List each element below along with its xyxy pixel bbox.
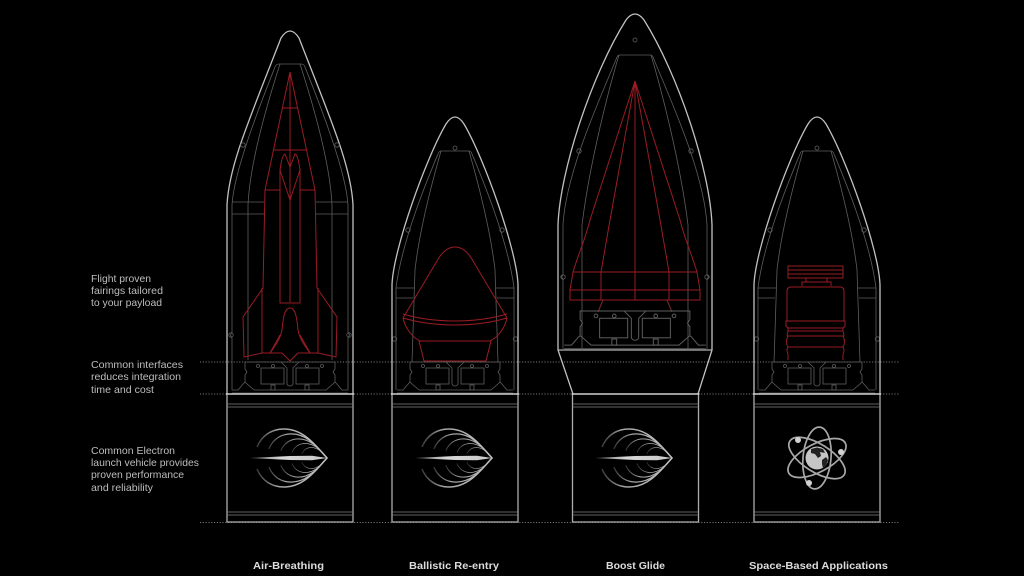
text: launch vehicle note: and reliability: [91, 483, 154, 494]
rocket: Space-Based Applications: [753, 117, 881, 522]
column titles: [253, 561, 888, 572]
text: launch vehicle note: [91, 446, 199, 494]
interface bay: [759, 362, 875, 393]
fairing outline and interior: [392, 117, 518, 394]
booster section: [572, 394, 700, 522]
enlarged interface bay: [564, 311, 706, 349]
text: launch vehicle note: Common Electron: [91, 446, 175, 457]
booster section: [753, 394, 881, 522]
text: interface note: Common interfaces: [91, 360, 183, 371]
rocket: Boost Glide: [558, 14, 712, 522]
extended fairing outline: [558, 14, 712, 394]
icon: swoosh logo: [250, 429, 327, 487]
column titles: Air-Breathing: [253, 561, 324, 572]
text: launch vehicle note: proven performance: [91, 470, 184, 481]
text: fairing note: Flight proven: [91, 274, 151, 285]
text: fairing note: [91, 274, 163, 309]
icon: swoosh logo: [415, 429, 492, 487]
text: fairing note: to your payload: [91, 298, 162, 309]
fairing outline and interior: [754, 117, 880, 394]
text: interface note: reduces integration: [91, 372, 181, 383]
fairing outline: [227, 31, 353, 394]
text: fairing note: fairings tailored: [91, 286, 163, 297]
booster section: [226, 394, 354, 522]
icon: atom and globe: [782, 426, 852, 490]
text: interface note: [91, 360, 183, 396]
column titles: Ballistic Re-entry: [409, 561, 499, 572]
column titles: Space-Based Applications: [749, 561, 888, 572]
fairing interior and red glide vehicle: [561, 38, 709, 350]
red satellite payload: [786, 266, 845, 360]
text: launch vehicle note: launch vehicle provides: [91, 458, 199, 469]
rocket: Air-Breathing: [226, 31, 354, 522]
rocket: Ballistic Re-entry: [391, 117, 519, 522]
interface bay: [397, 362, 513, 393]
column titles: Boost Glide: [606, 561, 665, 572]
interface bay: [232, 362, 348, 393]
booster section: [391, 394, 519, 522]
guide lines: [200, 362, 900, 522]
fairing interior and red air-breathing vehicle: [229, 64, 351, 390]
red re-entry capsule: [403, 247, 507, 361]
text: interface note: time and cost: [91, 385, 154, 396]
icon: swoosh logo: [595, 429, 672, 487]
